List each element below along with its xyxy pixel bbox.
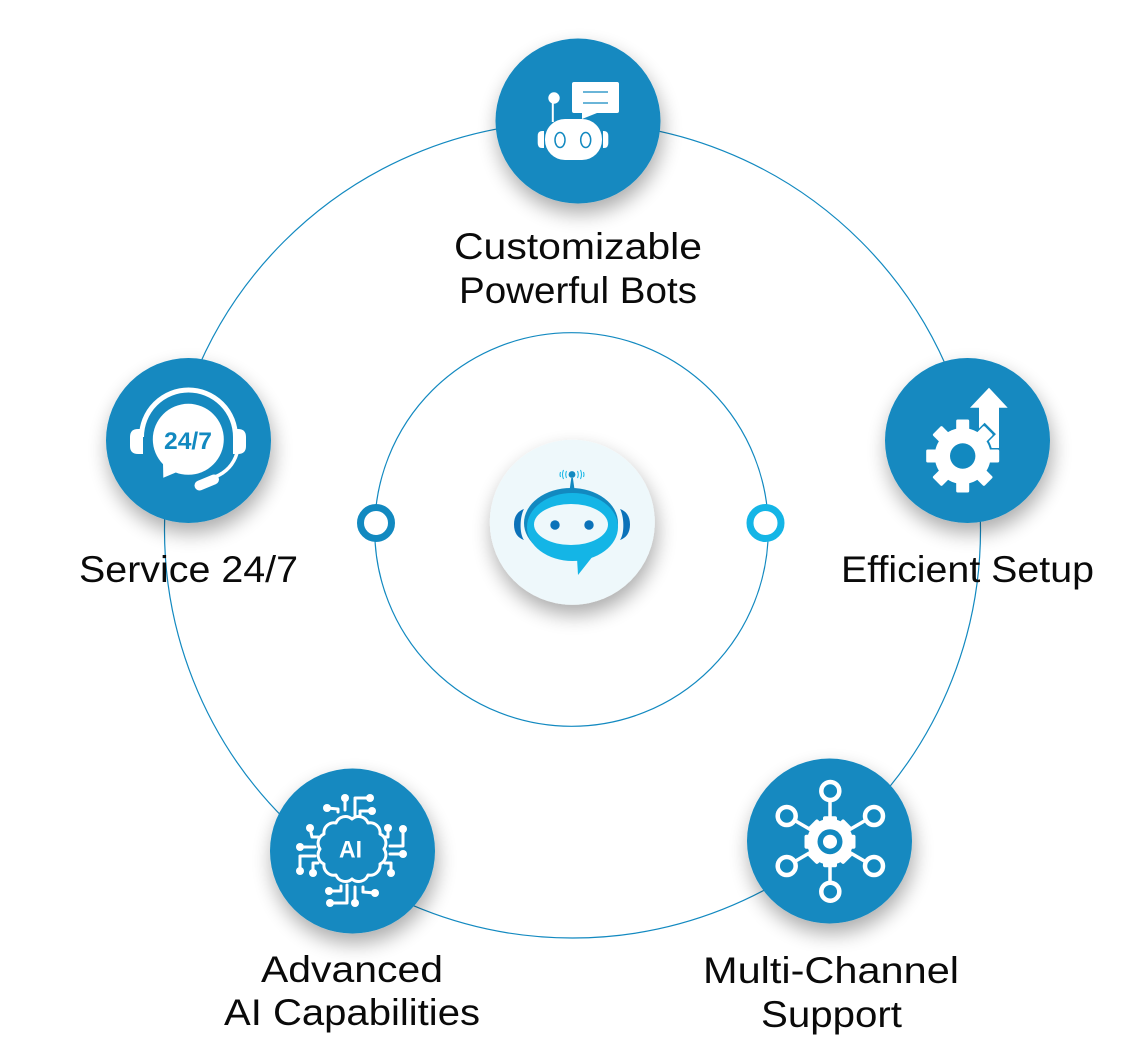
label: advanced ai capabilities: Advanced — [261, 949, 443, 990]
icon: robot with chat bubble — [538, 82, 619, 160]
left ring marker — [360, 508, 392, 538]
icon: headset with 24/7 bubble: 24/7 — [164, 428, 212, 455]
label: efficient setup: Efficient Setup — [841, 549, 1094, 590]
icon: gear with up arrow — [926, 388, 1008, 492]
node: efficient setup — [885, 358, 1050, 523]
icon: AI brain circuit: AI — [339, 836, 362, 864]
icon: headset with 24/7 bubble — [130, 390, 246, 486]
label: customizable powerful bots: Powerful Bots — [459, 270, 697, 311]
icon: AI brain circuit — [296, 794, 407, 907]
right ring marker — [750, 508, 781, 538]
node: advanced ai capabilities — [270, 768, 435, 934]
inner ring — [375, 333, 768, 726]
label: customizable powerful bots — [454, 226, 702, 311]
label: customizable powerful bots: Customizable — [454, 226, 702, 267]
node: customizable powerful bots — [496, 38, 660, 204]
label: multi-channel support: Multi-Channel — [703, 950, 959, 991]
label: service 24/7: Service 24/7 — [79, 549, 298, 590]
label: advanced ai capabilities: AI Capabilities — [224, 992, 480, 1033]
center bot badge — [490, 440, 655, 605]
node: multi-channel support — [747, 758, 912, 924]
label: advanced ai capabilities — [224, 949, 480, 1033]
label: multi-channel support: Support — [761, 994, 903, 1035]
label: multi-channel support — [703, 950, 959, 1035]
icon: hub gear network — [778, 782, 883, 901]
node: service 24/7 — [106, 358, 271, 523]
icon: center robot — [514, 470, 630, 575]
outer ring — [164, 122, 980, 938]
